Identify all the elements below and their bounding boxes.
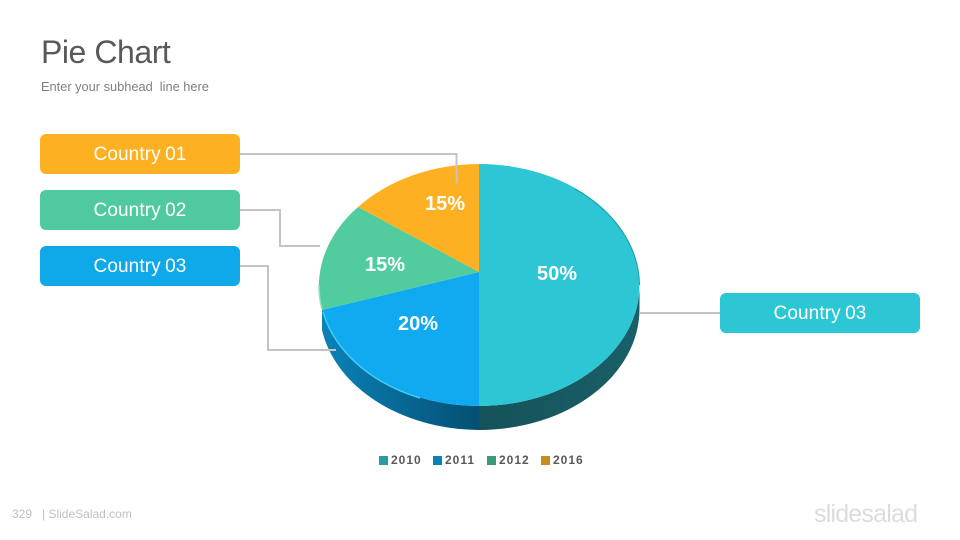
leader lines: [240, 154, 720, 350]
side: teal: [479, 285, 640, 430]
value: 15% orange: 15%: [425, 193, 465, 215]
label: Country 01: Country 01: [94, 144, 186, 165]
legend: 2016: [553, 453, 584, 467]
side: blue: [322, 310, 479, 430]
legend: 2011: [445, 453, 475, 467]
label: Country 03 right: [720, 293, 920, 333]
label: Country 02: [40, 190, 240, 230]
slice: 50%: [479, 164, 639, 406]
footer: logo: slidesalad: [814, 500, 917, 528]
label: Country 01: [40, 134, 240, 174]
rim shade: teal: [575, 189, 640, 285]
value: 20%: 20%: [398, 313, 438, 335]
legend: 2010: [391, 453, 422, 467]
rim highlight: green: [319, 285, 322, 309]
footer: page number: 329 | SlideSalad.com: [12, 507, 132, 521]
subhead: Enter your subhead line here: [41, 79, 209, 94]
value: 50%: 50%: [537, 263, 577, 285]
label: Country 03 right: Country 03: [774, 303, 866, 324]
legend item 2016: [541, 456, 550, 465]
label: Country 03: [40, 246, 240, 286]
legend item 2010: [379, 456, 388, 465]
label: Country 02: Country 02: [94, 200, 186, 221]
legend: 2012: [499, 453, 530, 467]
slice: 15% orange: [358, 164, 479, 272]
legend item 2011: [433, 456, 442, 465]
legend: [379, 453, 584, 467]
rim highlight: blue: [323, 312, 420, 398]
slice: 20%: [322, 272, 479, 406]
title: Pie Chart: [41, 34, 170, 70]
label: Country 03: Country 03: [94, 256, 186, 277]
slice: 15% green: [319, 207, 479, 310]
value: 15% green: 15%: [365, 254, 405, 276]
legend item 2012: [487, 456, 496, 465]
